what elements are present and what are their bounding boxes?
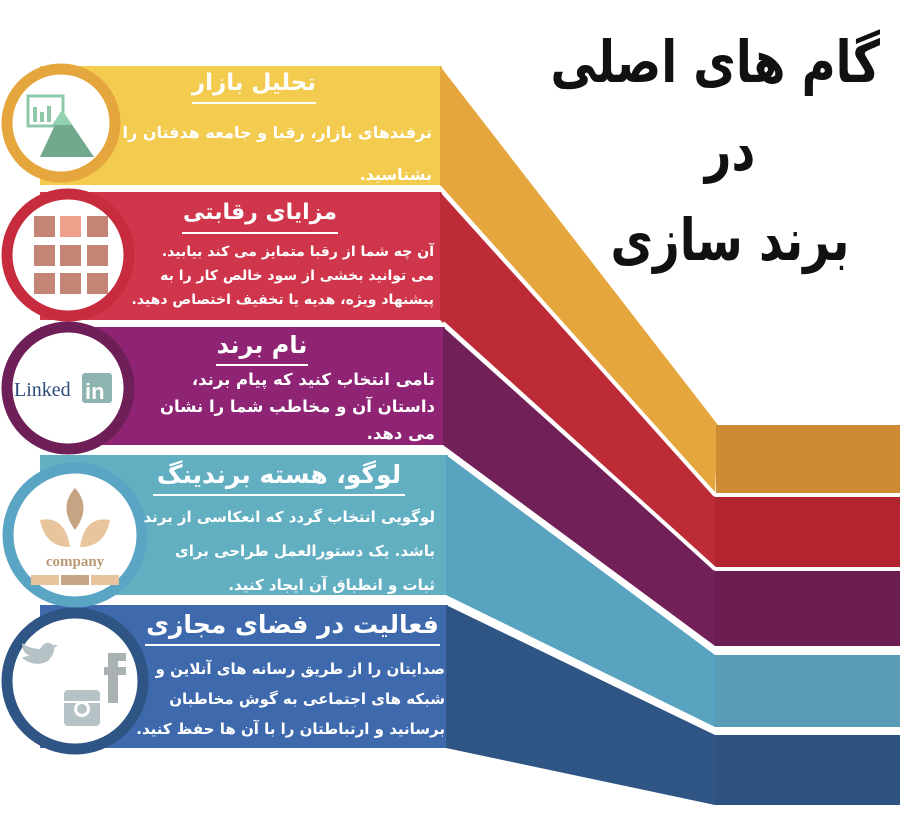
icon circle: logo [2, 462, 148, 608]
panel text: competitive advantage: آن چه شما از رقبا متمایز می کند بیابید. [162, 244, 434, 260]
panel text: logo: لوگویی انتخاب گردد که انعکاسی از برند [143, 508, 435, 526]
panel heading: competitive advantage: مزایای رقابتی [183, 200, 337, 225]
panel text: market analysis: ترفندهای بازار، رقبا و جامعه هدفتان را [123, 123, 432, 142]
panel text: social media [136, 660, 445, 738]
icon circle: brand name (LinkedIn): in [85, 379, 105, 404]
panel heading: brand name [216, 326, 308, 366]
icon circle: social media [2, 608, 148, 754]
panel heading: market analysis [192, 64, 316, 104]
ribbon: red [40, 192, 900, 567]
icon circle: market analysis [2, 64, 120, 182]
panel text: social media: شبکه های اجتماعی به گوش مخاطبان [169, 690, 445, 708]
ribbon: yellow [40, 66, 900, 493]
panel text: competitive advantage: پیشنهاد ویژه، هدیه یا تخفیف اختصاص دهید. [132, 292, 434, 308]
panel text: competitive advantage [132, 242, 434, 308]
title: برند سازی [611, 206, 849, 274]
panel heading: social media: فعالیت در فضای مجازی [146, 610, 439, 639]
panel text: brand name [160, 370, 435, 443]
title: گام های اصلی [551, 28, 880, 96]
ribbon: blue [40, 605, 900, 805]
panel text: brand name: نامی انتخاب کنید که پیام برند، [192, 370, 435, 389]
panel text: brand name: داستان آن و مخاطب شما را نشان [160, 397, 435, 416]
panel text: logo: ثبات و انطباق آن ایجاد کنید. [228, 576, 435, 594]
ribbon: purple [40, 327, 900, 646]
title: در [705, 116, 755, 184]
panel text: brand name: می دهد. [367, 424, 435, 443]
panel text: social media: صدایتان را از طریق رسانه های آنلاین و [156, 660, 445, 678]
panel text: market analysis [123, 123, 432, 184]
icon circle: competitive advantage [2, 188, 134, 322]
panel heading: competitive advantage [182, 194, 338, 234]
panel heading: logo: لوگو، هسته برندینگ [157, 460, 401, 489]
icon circle: brand name (LinkedIn): Linked [14, 379, 71, 401]
ribbon: teal [40, 455, 900, 727]
title [551, 28, 880, 274]
panel text: market analysis: بشناسید. [360, 165, 432, 184]
panel heading: market analysis: تحلیل بازار [192, 70, 316, 96]
panel text: logo [143, 508, 435, 594]
panel text: logo: باشد. یک دستورالعمل طراحی برای [175, 542, 435, 560]
panel text: social media: برسانید و ارتباطتان را با آن ها حفظ کنید. [136, 720, 445, 738]
icon circle: brand name (LinkedIn) [2, 322, 134, 454]
icon circle: logo: company [46, 554, 105, 570]
panel text: competitive advantage: می توانید بخشی از سود خالص کار را به [160, 268, 434, 284]
panel heading: brand name: نام برند [217, 331, 307, 359]
